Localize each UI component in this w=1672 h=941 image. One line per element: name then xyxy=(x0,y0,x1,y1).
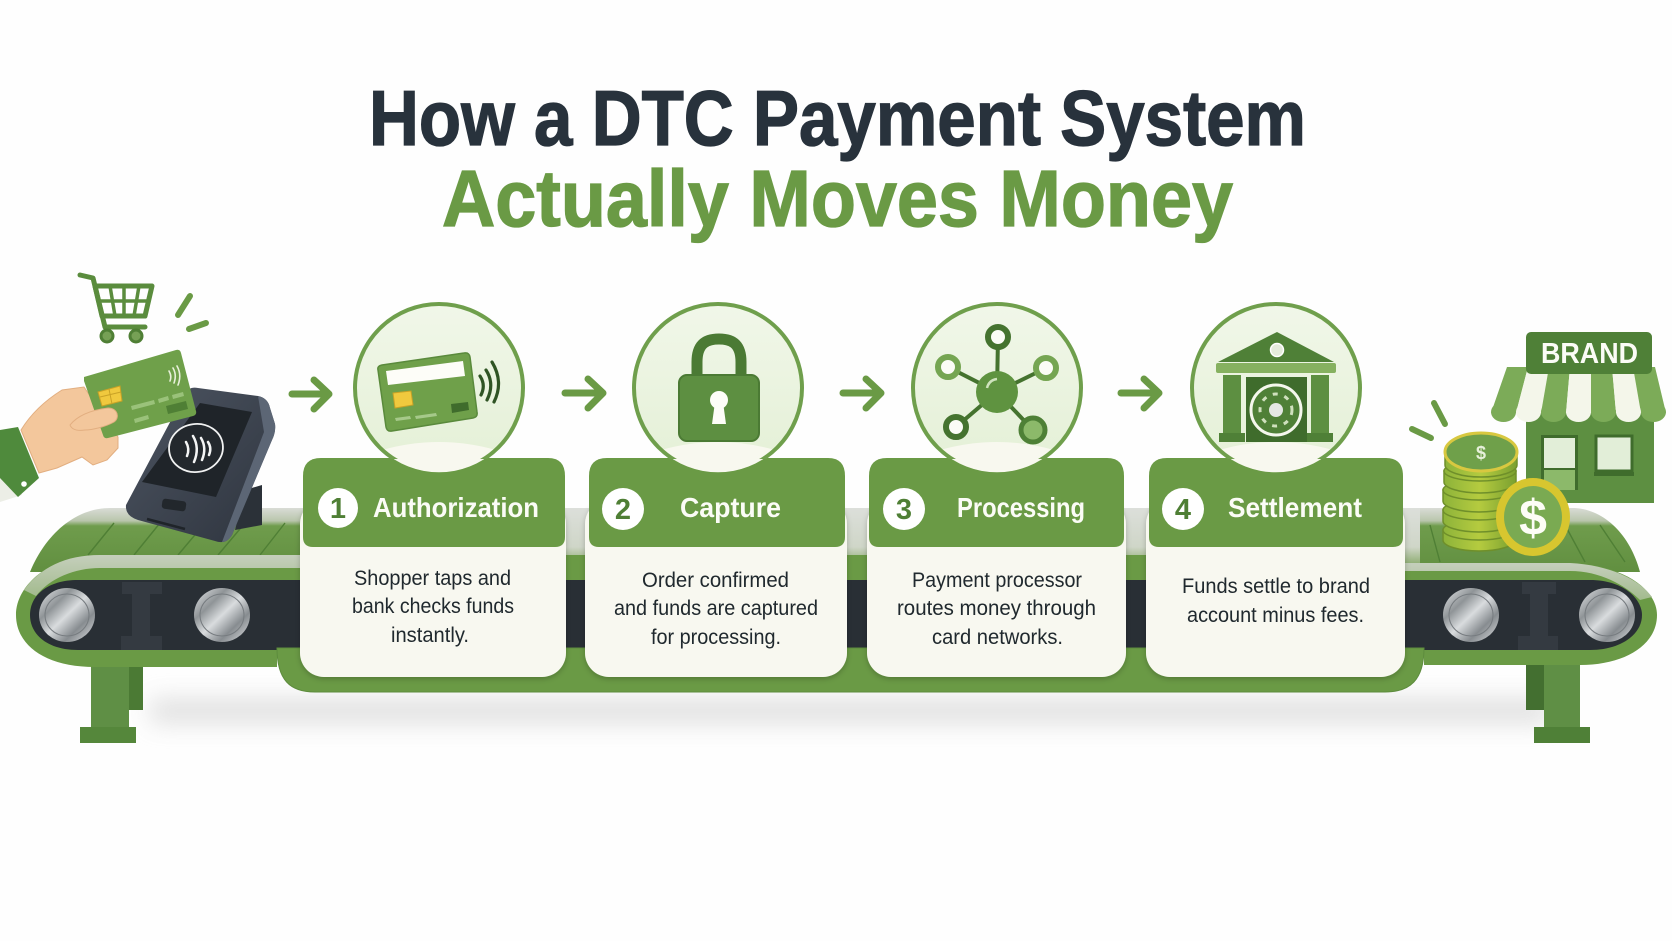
thumb xyxy=(70,408,117,430)
icon: shopping cart xyxy=(80,275,152,342)
card body xyxy=(867,500,1126,677)
large dollar coin: $ xyxy=(1519,490,1547,546)
left sparks xyxy=(178,296,206,329)
description: bank checks funds xyxy=(352,595,514,618)
card header xyxy=(869,458,1124,547)
title xyxy=(369,74,1306,243)
panel: processing xyxy=(867,458,1126,677)
brackets xyxy=(121,582,1558,650)
card body xyxy=(300,500,566,677)
heading: Capture xyxy=(680,492,781,523)
belt gap surface xyxy=(303,508,1420,568)
description: Payment processor xyxy=(912,569,1082,592)
description: instantly. xyxy=(391,624,469,647)
arrow 2 xyxy=(565,379,603,408)
brand sign xyxy=(1526,332,1652,374)
belt dark interior xyxy=(30,580,1642,650)
store building xyxy=(1526,410,1654,503)
description: account minus fees. xyxy=(1187,604,1364,627)
arrow 3 xyxy=(843,379,881,408)
card body xyxy=(1146,500,1405,677)
step number xyxy=(1162,488,1204,530)
icon circle: network xyxy=(913,304,1081,472)
belt top surface xyxy=(30,508,1640,572)
stacked coins xyxy=(1443,433,1517,551)
description xyxy=(352,567,514,647)
icon: brand store xyxy=(1491,332,1666,503)
step number xyxy=(318,488,358,528)
icon: coin stack xyxy=(1443,433,1570,556)
conveyor belt xyxy=(16,508,1657,743)
arrow 4 xyxy=(1121,379,1159,408)
description xyxy=(1182,575,1370,627)
description: for processing. xyxy=(651,626,781,649)
title: How a DTC Payment System xyxy=(369,74,1306,162)
arrow 1 xyxy=(292,380,329,409)
icon circle: card xyxy=(355,304,523,472)
hand xyxy=(21,387,118,473)
heading: Settlement xyxy=(1228,492,1362,523)
card body xyxy=(585,500,847,677)
panel: authorization xyxy=(300,458,566,677)
lower belt tray xyxy=(277,648,1424,692)
rollers xyxy=(39,588,1635,642)
belt slats xyxy=(88,523,1625,562)
brand sign: BRAND xyxy=(1541,338,1638,370)
description: routes money through xyxy=(897,597,1096,620)
card header xyxy=(589,458,845,547)
step number xyxy=(883,488,925,530)
icon circle: padlock xyxy=(634,304,802,472)
step number: 4 xyxy=(1175,494,1191,526)
icon: coin stack: $ xyxy=(1476,443,1486,463)
awning xyxy=(1491,367,1666,422)
icon: hand with card xyxy=(0,350,196,502)
sleeve xyxy=(0,474,22,502)
title: Actually Moves Money xyxy=(442,154,1233,243)
icon circle: bank vault xyxy=(1192,304,1360,472)
step number: 3 xyxy=(896,494,912,526)
step number: 1 xyxy=(330,493,346,525)
description: Order confirmed xyxy=(642,569,789,592)
heading: Authorization xyxy=(373,492,539,523)
panel: capture xyxy=(585,458,847,677)
heading: Processing xyxy=(957,492,1085,523)
step number xyxy=(602,488,644,530)
description xyxy=(614,569,818,649)
conveyor legs xyxy=(80,660,1590,743)
belt highlight band xyxy=(24,555,1652,600)
description xyxy=(897,569,1096,649)
right sparks xyxy=(1412,403,1445,438)
description: Shopper taps and xyxy=(354,567,511,590)
description: and funds are captured xyxy=(614,597,818,620)
credit card xyxy=(84,350,196,438)
icon: payment terminal xyxy=(126,388,275,542)
belt frame xyxy=(16,555,1657,667)
card header xyxy=(1149,458,1403,547)
cuff xyxy=(0,427,39,497)
description: Funds settle to brand xyxy=(1182,575,1370,598)
description: card networks. xyxy=(932,626,1063,649)
floor shadow xyxy=(150,698,1550,724)
card header xyxy=(303,458,565,547)
panel: settlement xyxy=(1146,458,1405,677)
step number: 2 xyxy=(615,494,631,526)
